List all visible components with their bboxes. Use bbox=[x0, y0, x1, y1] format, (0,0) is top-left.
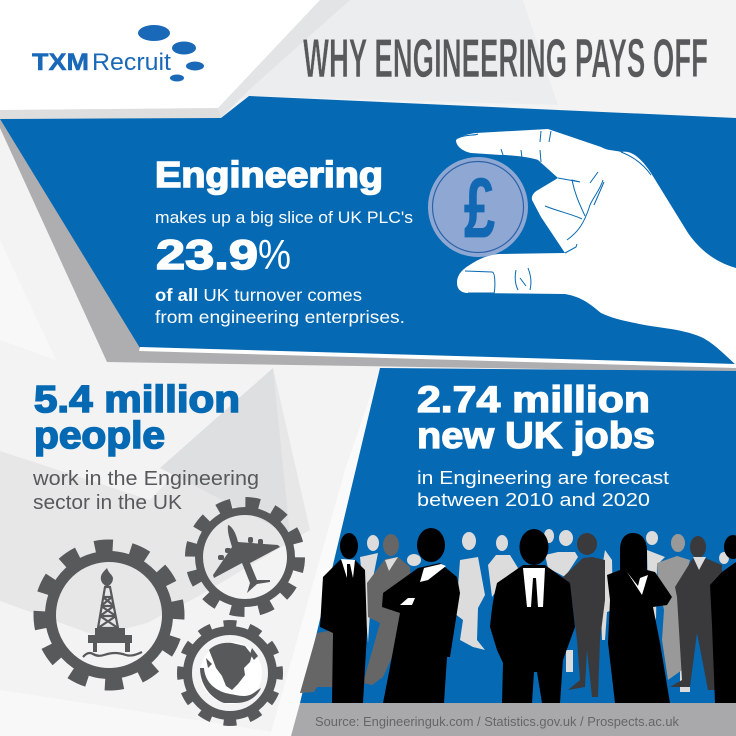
logo bbox=[32, 25, 204, 82]
text: engineering statistic: of all UK turnover comes bbox=[155, 285, 362, 305]
shirts and ties bbox=[341, 559, 648, 607]
light figures bbox=[360, 529, 729, 692]
text: jobs forecast: new UK jobs bbox=[417, 415, 655, 456]
text: people statistic bbox=[32, 379, 259, 514]
icon: plane gear bbox=[184, 496, 306, 618]
text: people statistic: sector in the UK bbox=[33, 492, 183, 514]
logo: TXM bbox=[32, 49, 89, 76]
text: engineering statistic: 23.9 bbox=[156, 231, 258, 278]
text: jobs forecast: in Engineering are forecast bbox=[417, 467, 669, 488]
text: jobs forecast: between 2010 and 2020 bbox=[417, 489, 650, 510]
text: engineering statistic: from engineering enterprises. bbox=[155, 307, 405, 327]
source text: Source: Engineeringuk.com / Statistics.gov.uk / Prospects.ac.uk bbox=[315, 714, 679, 729]
logo: Recruit bbox=[92, 49, 171, 76]
panel: lower blue bbox=[300, 368, 736, 703]
grey band under blue panel bbox=[0, 119, 736, 372]
panel: top blue bbox=[0, 96, 736, 368]
icon: pound coin bbox=[428, 157, 528, 257]
text: engineering statistic: makes up a big slice of UK PLC's bbox=[155, 208, 413, 227]
text: engineering statistic: % bbox=[258, 231, 291, 278]
text: jobs forecast: 2.74 million bbox=[417, 379, 650, 420]
text: people statistic: 5.4 million bbox=[34, 379, 240, 421]
people crowd bbox=[300, 528, 736, 703]
text: people statistic: people bbox=[34, 415, 165, 457]
black figures bbox=[320, 528, 736, 703]
text: jobs forecast bbox=[417, 379, 669, 510]
text: people statistic: work in the Engineering bbox=[32, 468, 259, 490]
dark grey figures bbox=[563, 557, 605, 697]
text: engineering statistic: Engineering bbox=[155, 154, 383, 195]
icon: globe gear bbox=[182, 625, 278, 721]
icon: oil rig gear bbox=[36, 542, 182, 688]
hand holding coin bbox=[456, 129, 736, 365]
text: engineering statistic bbox=[155, 154, 413, 327]
icon: pound coin: £ bbox=[464, 161, 495, 255]
footer bar bbox=[291, 703, 736, 736]
mid grey figures bbox=[363, 557, 412, 685]
